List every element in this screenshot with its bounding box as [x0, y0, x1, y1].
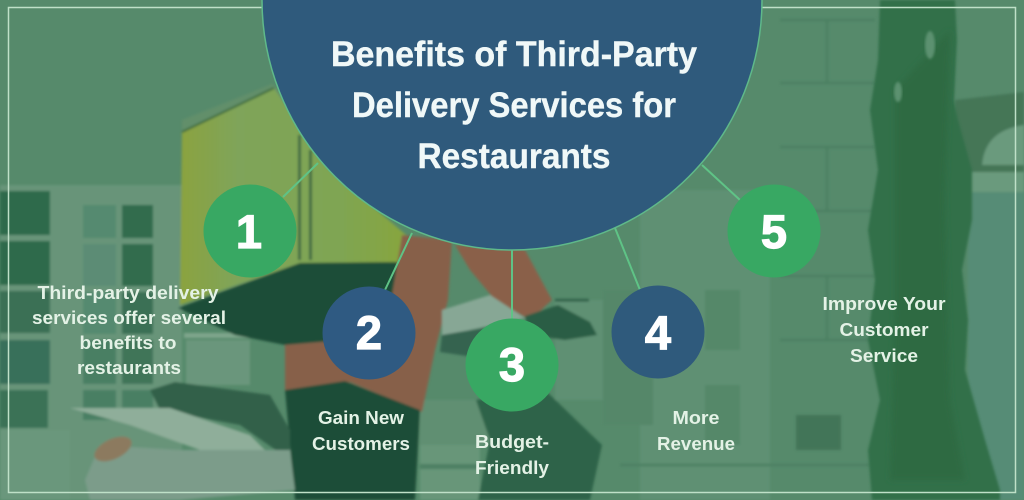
- item 5: number circle: [728, 184, 820, 278]
- rider body: orange jacket and dark trousers: [285, 235, 552, 500]
- item 1: number circle: 1: [236, 205, 262, 258]
- item 2: text: [312, 408, 410, 454]
- scooter seat, rear and handlebar: [70, 295, 602, 500]
- item 3: number circle: [466, 318, 558, 412]
- right building stone blocks and windows: [603, 20, 875, 500]
- item 3: number circle: 3: [499, 338, 525, 391]
- item 2: number circle: [322, 286, 416, 380]
- lower background bands: [420, 300, 603, 500]
- item 3: text: Friendly: [475, 458, 549, 478]
- title: Delivery Services for: [352, 86, 676, 125]
- item 3: text: [475, 432, 549, 478]
- left building windows: [0, 185, 284, 500]
- box base, dark: [178, 262, 400, 345]
- item 5: number circle: 5: [761, 205, 787, 258]
- tree: [868, 0, 1000, 500]
- connector lines: [283, 163, 740, 322]
- item 4: text: More: [672, 408, 720, 428]
- item 2: text: Gain New: [318, 408, 405, 428]
- item 2: text: Customers: [312, 434, 410, 454]
- item 4: number circle: [612, 286, 704, 378]
- item 2: number circle: 2: [356, 306, 382, 359]
- delivery box: [180, 84, 412, 305]
- item 1: text: restaurants: [77, 358, 181, 378]
- item 1: text: Third-party delivery: [38, 283, 218, 303]
- item 5: text: Improve Your: [822, 294, 946, 314]
- item 1: number circle: [204, 184, 296, 278]
- item 5: text: Customer: [840, 320, 928, 340]
- right window and arch: [955, 92, 1024, 500]
- title: Benefits of Third-Party: [331, 35, 698, 74]
- item 1: text: services offer several: [32, 308, 226, 328]
- central title circle: [262, 0, 762, 250]
- item 1: text: [32, 283, 226, 378]
- item 5: text: [822, 294, 946, 366]
- title: Restaurants: [418, 137, 610, 176]
- item 4: text: Revenue: [657, 434, 735, 454]
- item 5: text: Service: [850, 346, 918, 366]
- item 3: text: Budget-: [475, 432, 549, 452]
- item 1: text: benefits to: [80, 333, 176, 353]
- item 4: text: [657, 408, 735, 454]
- title: [331, 35, 698, 176]
- item 4: number circle: 4: [645, 306, 671, 359]
